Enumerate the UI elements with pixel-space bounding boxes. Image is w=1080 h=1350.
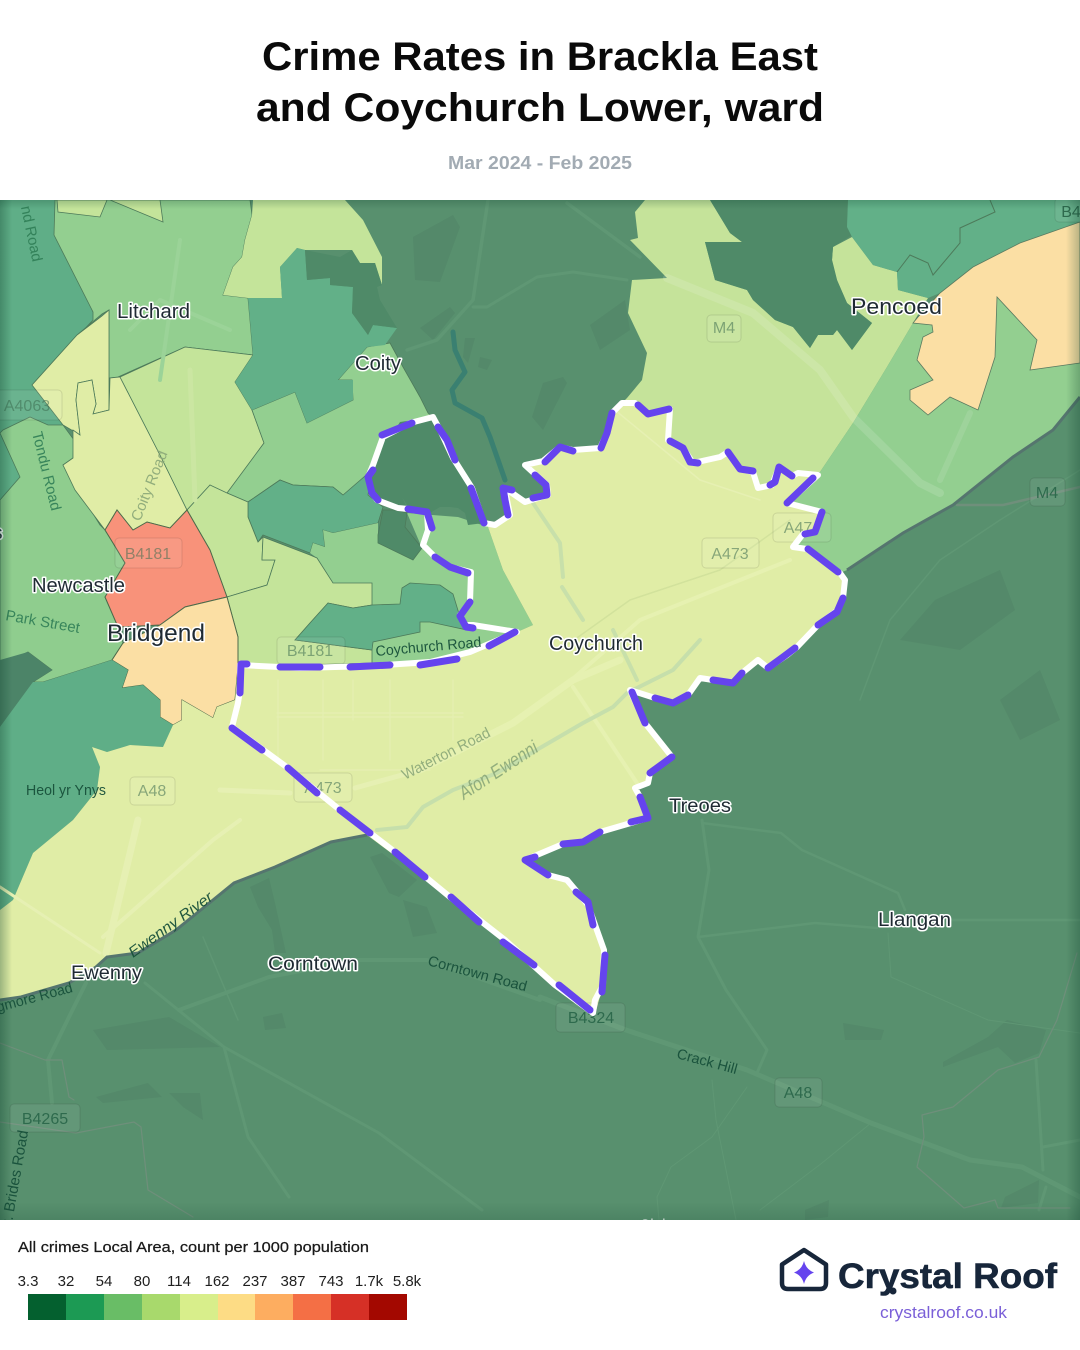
darker patch north of Coity: [305, 250, 397, 335]
road number boxes: M4: [713, 320, 735, 337]
rural base area: [0, 200, 1080, 1220]
place labels: Coity: [355, 353, 401, 375]
road labels: Coity Road: [128, 448, 172, 523]
river north of ward: [452, 332, 505, 480]
light green Coity region: [227, 343, 433, 503]
pale green region north of ward: [622, 200, 928, 488]
dark inner ward patch: [378, 510, 422, 560]
pale green central region: [120, 347, 264, 510]
ward outline purple dashes: [232, 405, 843, 1010]
legend scale labels: 114: [167, 1273, 191, 1290]
logo wordmark: Crystal Roof: [838, 1257, 1057, 1296]
medium green south-west of ward: [248, 470, 383, 553]
road number boxes: B4181: [287, 643, 333, 660]
title: [256, 35, 824, 130]
road number boxes: B4265: [22, 1111, 68, 1128]
light green inner ward region: [310, 513, 533, 663]
legend scale labels: 162: [204, 1273, 230, 1290]
peach Bridgend region: [112, 597, 238, 725]
road labels: Crack Hill: [675, 1046, 739, 1078]
peach Pencoed region: [910, 222, 1080, 415]
legend scale labels: 32: [58, 1273, 74, 1290]
medium green Coity cluster: [235, 248, 397, 423]
road number boxes: B4324: [568, 1010, 614, 1027]
legend scale labels: 237: [242, 1273, 268, 1290]
east light green region: [787, 297, 1080, 573]
medium green south-west region: [0, 660, 173, 910]
legend colour bar: [28, 1294, 407, 1320]
west green area: [0, 200, 92, 499]
subtitle: date range: Mar 2024 - Feb 2025: [448, 153, 632, 173]
place labels: Coychurch: [549, 633, 643, 655]
road labels: Coychurch Road: [375, 635, 482, 660]
place labels: Treoes: [669, 796, 731, 817]
pale yellow region north of Coity Road: [32, 310, 109, 435]
road labels: Ewenny River: [125, 888, 217, 961]
road number boxes: A48: [784, 1085, 812, 1102]
road number boxes: A473: [304, 780, 342, 797]
pale yellow ward and south-west band: [0, 403, 845, 1015]
place labels: Newcastle: [32, 575, 125, 597]
dark inner ward region: [372, 420, 480, 525]
title: Crime Rates in Brackla East: [262, 35, 818, 79]
road number boxes: M4: [1036, 485, 1058, 502]
road labels: Tondu Road: [28, 430, 64, 512]
legend scale labels: 387: [280, 1273, 306, 1290]
legend scale labels: [18, 1273, 422, 1290]
place labels: Ewenny: [71, 963, 143, 984]
road number boxes: A47: [784, 520, 812, 537]
road number boxes: B4181: [125, 546, 171, 563]
Newcastle light green area: [0, 417, 125, 682]
road labels: nd Road: [17, 204, 45, 263]
top-left pale patches: [57, 200, 163, 222]
road labels: Corntown Road: [426, 953, 529, 995]
road labels: Waterton Road: [399, 724, 493, 784]
choropleth map: [0, 198, 1080, 1242]
website link: crystalroof.co.uk: [880, 1303, 1008, 1322]
medium green top-right: [847, 200, 1080, 298]
salmon high-crime region: [105, 510, 227, 627]
road number boxes: [0, 198, 1080, 1132]
place labels: Bridgend: [107, 620, 205, 647]
pale green region above B4181: [227, 537, 372, 667]
medium green south ward patch: [295, 583, 467, 650]
place labels: Pencoed: [851, 294, 942, 319]
medium green top-right ward line: [897, 200, 995, 275]
place labels: Llangan: [878, 910, 951, 931]
ward outline white: [232, 403, 845, 1013]
road labels: Heol yr Ynys: [26, 783, 106, 799]
place labels: Corntown: [268, 954, 358, 975]
map edge shading: [0, 200, 1080, 1220]
road number boxes: A48: [138, 783, 166, 800]
south boundary line dark: [0, 835, 367, 1000]
pale yellow Coity Road region: [63, 377, 187, 530]
place labels: [0, 294, 951, 1242]
icon: house logo with star: [782, 1250, 826, 1289]
road number boxes: A4063: [4, 398, 50, 415]
road number boxes: A473: [711, 546, 749, 563]
road labels: [0, 204, 739, 1225]
Litchard light green region: [32, 200, 253, 385]
dark patch west: [0, 652, 52, 727]
legend scale labels: 54: [96, 1273, 112, 1290]
place labels: Litchard: [117, 301, 190, 323]
title: and Coychurch Lower, ward: [256, 86, 824, 130]
pale green top region: [223, 200, 382, 298]
legend scale labels: 5.8k: [393, 1273, 422, 1290]
road labels: Afon Ewenni: [455, 737, 543, 805]
south-east dark boundary: [847, 397, 1080, 570]
road labels: Park Street: [4, 607, 82, 637]
place labels: Sigingstone: [640, 1215, 720, 1242]
legend scale labels: 1.7k: [355, 1273, 384, 1290]
faint ward roads and river: [0, 240, 970, 953]
dark patch north-east: [705, 200, 872, 350]
legend scale labels: 80: [134, 1273, 150, 1290]
legend scale labels: 3.3: [18, 1273, 38, 1290]
rural texture and roads: [0, 330, 1080, 1218]
legend scale labels: 743: [318, 1273, 344, 1290]
legend title: All crimes Local Area, count per 1000 population: [18, 1239, 369, 1256]
pale green south of salmon: [187, 485, 275, 597]
